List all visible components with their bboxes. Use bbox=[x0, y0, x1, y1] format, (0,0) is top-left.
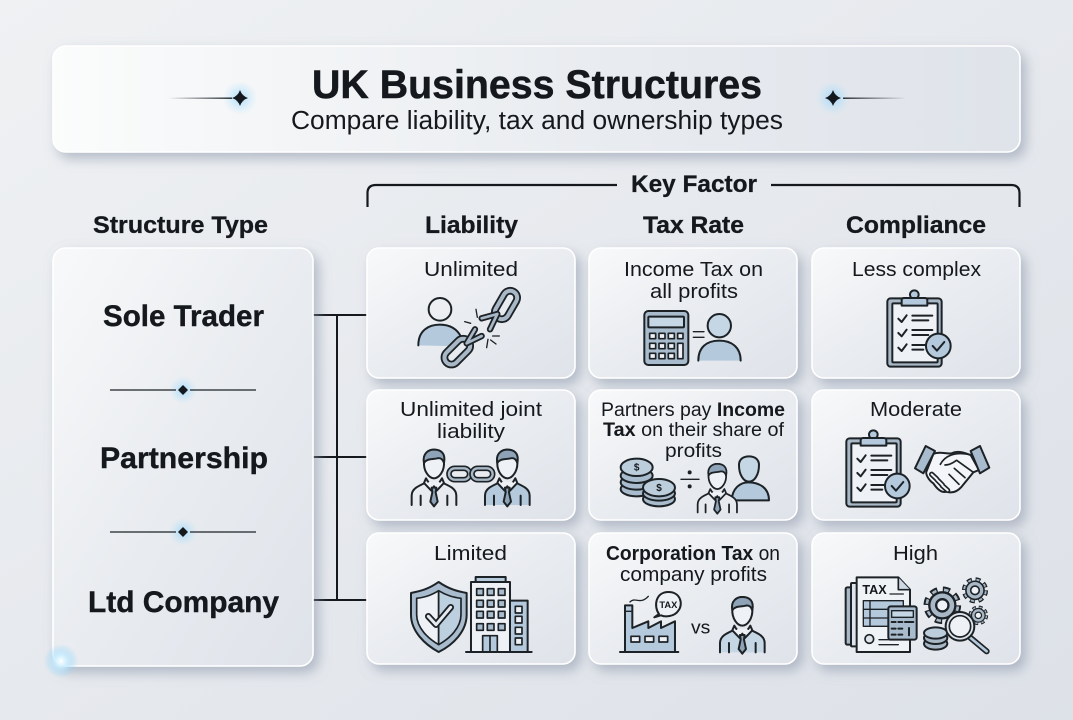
icon: person with broken chain bbox=[418, 288, 520, 367]
icon: clipboard and handshake bbox=[846, 430, 989, 507]
card: Partnership compliance: Moderate bbox=[870, 398, 962, 421]
icon: coins divided between partners: $ bbox=[656, 483, 662, 494]
icon: factory versus person bbox=[620, 592, 765, 654]
right sparkle ornament bbox=[816, 81, 906, 115]
icon: tax form, calculator, gears and magnifier: TAX bbox=[862, 583, 887, 597]
icon: calculator equals person bbox=[644, 311, 741, 365]
card: Sole Trader tax bbox=[589, 248, 797, 378]
key factor bracket: Key Factor bbox=[631, 171, 757, 198]
left sparkle ornament bbox=[168, 81, 257, 115]
key factor bracket bbox=[368, 171, 1020, 207]
icon: factory versus person: TAX bbox=[659, 600, 678, 610]
card: Ltd Company compliance: High bbox=[893, 542, 938, 565]
divider ornament 1 bbox=[110, 376, 256, 404]
card: Ltd Company liability bbox=[367, 533, 575, 664]
label: Partnership: Partnership bbox=[100, 442, 268, 475]
icon: two people linked by chain bbox=[412, 450, 530, 506]
card: Ltd Company tax: Corporation Tax on bbox=[606, 542, 780, 565]
column heading: Tax Rate: Tax Rate bbox=[643, 212, 744, 239]
corner glow bbox=[44, 644, 78, 678]
card: Sole Trader tax: all profits bbox=[650, 280, 738, 303]
icon: checklist clipboard bbox=[887, 290, 951, 367]
card: Sole Trader tax: Income Tax on bbox=[624, 258, 763, 281]
connector lines bbox=[313, 315, 367, 600]
column heading: Compliance: Compliance bbox=[846, 212, 986, 239]
label: Ltd Company: Ltd Company bbox=[88, 586, 280, 619]
card: Partnership liability: Unlimited joint bbox=[400, 398, 542, 421]
card: Sole Trader compliance: Less complex bbox=[852, 258, 982, 281]
card: Partnership liability: liability bbox=[437, 420, 506, 443]
card: Partnership liability bbox=[367, 390, 575, 520]
card: Partnership tax: profits bbox=[665, 441, 722, 462]
card: Ltd Company tax: company profits bbox=[620, 563, 767, 586]
header banner bbox=[53, 46, 1020, 152]
card: Ltd Company liability: Limited bbox=[434, 542, 507, 565]
card: Partnership tax: Tax on their share of bbox=[603, 420, 785, 441]
icon: shield and office building bbox=[411, 577, 532, 652]
card: Partnership tax: Partners pay Income bbox=[601, 400, 785, 421]
panel: structure types bbox=[53, 248, 313, 666]
icon: factory versus person: vs bbox=[691, 616, 710, 637]
icon: coins divided between partners: $ bbox=[634, 462, 640, 473]
header panel bbox=[53, 46, 1020, 152]
card: Sole Trader liability: Unlimited bbox=[424, 258, 518, 281]
column heading: Structure Type: Structure Type bbox=[93, 212, 268, 239]
card: Partnership tax bbox=[589, 390, 797, 520]
card: Sole Trader compliance bbox=[812, 248, 1020, 378]
label: Sole Trader: Sole Trader bbox=[103, 300, 265, 333]
card: Partnership compliance bbox=[812, 390, 1020, 520]
divider ornament 2 bbox=[110, 518, 256, 546]
card: Sole Trader liability bbox=[367, 248, 575, 378]
icon: tax form, calculator, gears and magnifier bbox=[846, 577, 987, 652]
subtitle: Compare liability, tax and ownership types bbox=[291, 107, 783, 135]
icon: coins divided between partners bbox=[621, 456, 769, 514]
card: Ltd Company tax bbox=[589, 533, 797, 664]
column heading: Liability: Liability bbox=[425, 212, 519, 239]
card: Ltd Company compliance bbox=[812, 533, 1020, 664]
title: UK Business Structures bbox=[312, 63, 762, 107]
